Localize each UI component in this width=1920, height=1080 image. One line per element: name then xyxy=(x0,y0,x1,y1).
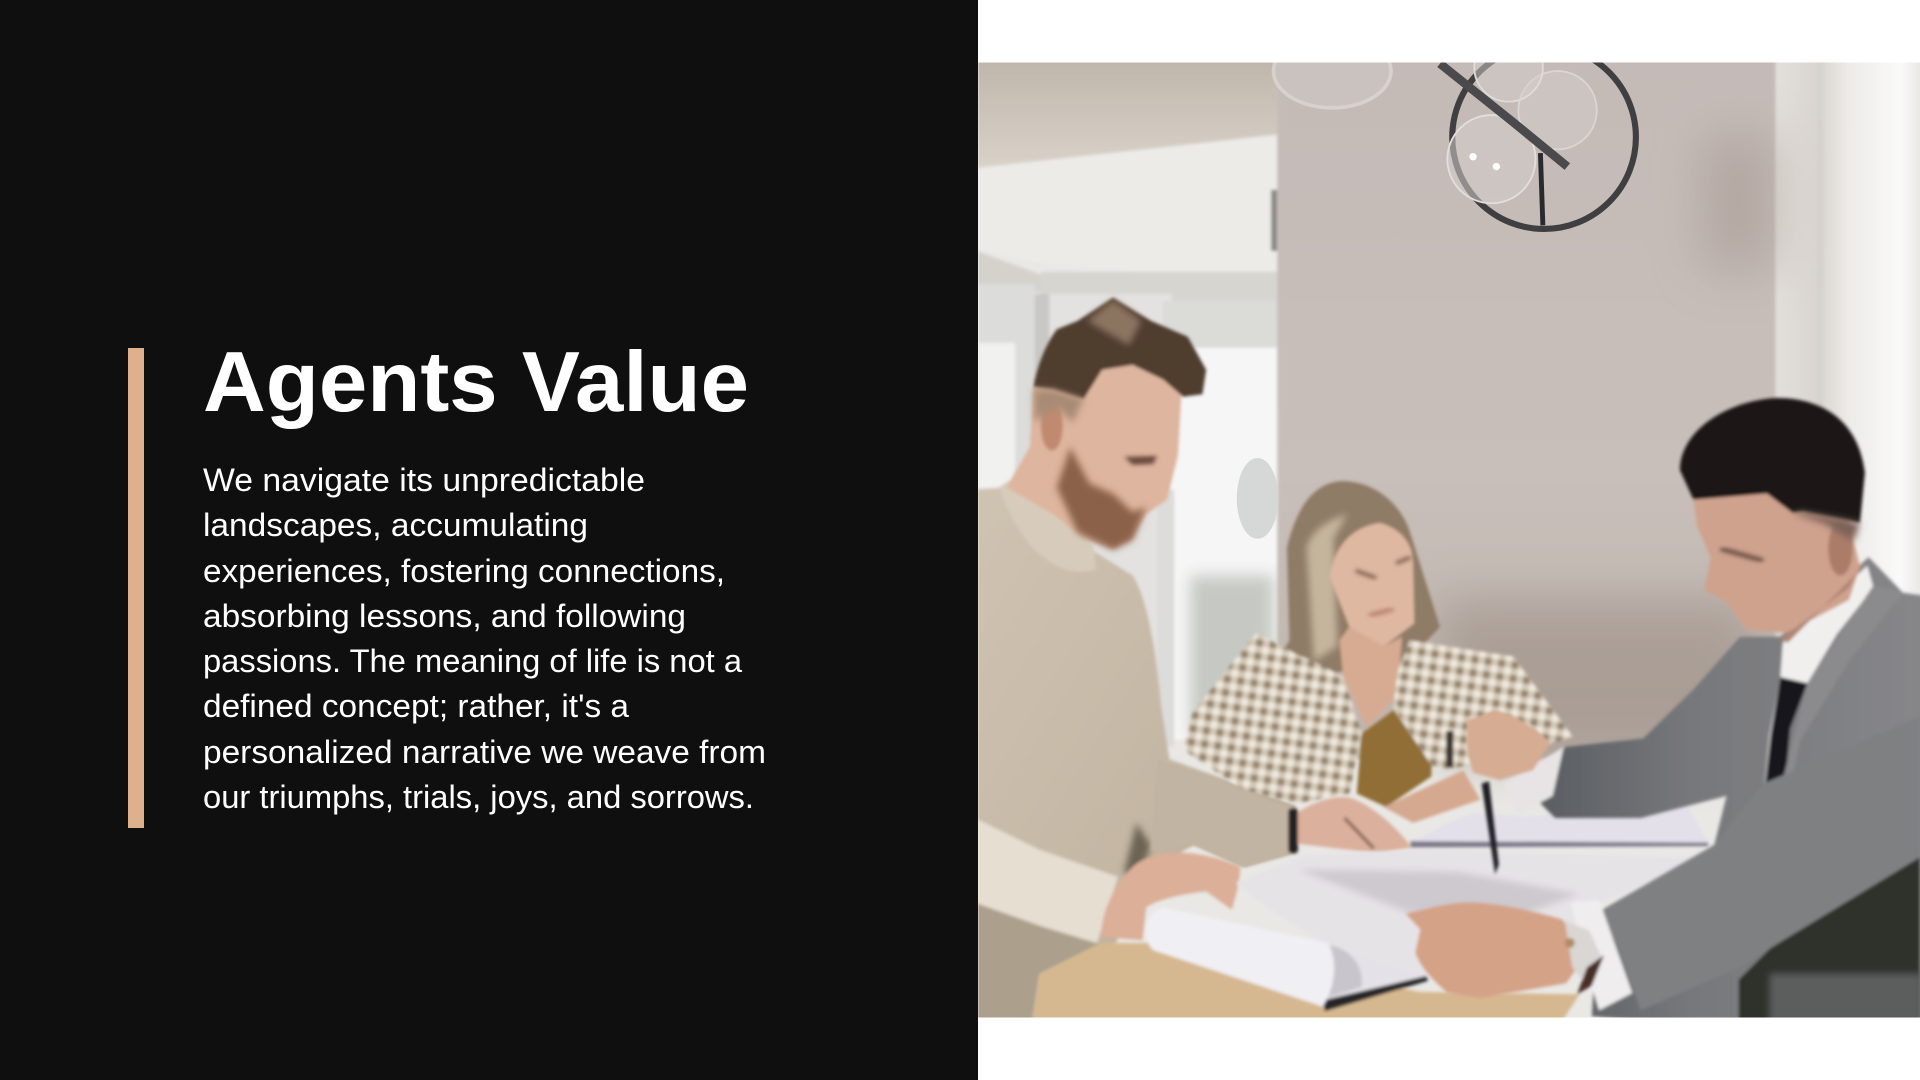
person: right man xyxy=(1406,398,1920,1029)
body text: experiences, fostering connections, xyxy=(203,553,725,589)
person: woman xyxy=(1183,481,1573,823)
body text: absorbing lessons, and following xyxy=(203,598,686,634)
person: left man xyxy=(967,298,1296,1022)
body text: passions. The meaning of life is not a xyxy=(203,643,742,679)
wall xyxy=(1277,49,1779,759)
title: Agents Value xyxy=(203,335,749,430)
pendant lamp xyxy=(1237,33,1636,539)
body text: our triumphs, trials, joys, and sorrows. xyxy=(203,779,754,815)
photo background: room xyxy=(967,49,1920,1029)
right man: suit xyxy=(1533,557,1920,1029)
body text: landscapes, accumulating xyxy=(203,507,588,543)
right man: cuff and hand xyxy=(1571,900,1632,1010)
left man: hand xyxy=(1101,853,1240,940)
table and papers xyxy=(1032,838,1710,1018)
photo: three people reviewing floor plans at a table xyxy=(967,33,1920,1029)
woman: jacket xyxy=(1183,633,1362,803)
woman: face xyxy=(1330,523,1414,647)
body text: personalized narrative we weave from xyxy=(203,734,766,770)
woman: arm xyxy=(1384,770,1480,823)
left man: forearm and hand over jacket xyxy=(1150,792,1412,868)
panel: dark left panel xyxy=(0,0,978,1080)
right man: shirt and tie xyxy=(1762,564,1875,784)
left man: sweater xyxy=(967,487,1296,1022)
curtain xyxy=(1776,49,1920,661)
accent bar xyxy=(128,348,144,828)
body text: We navigate its unpredictable xyxy=(203,462,645,498)
woman: hair xyxy=(1273,481,1440,676)
body text xyxy=(203,462,766,815)
body text: defined concept; rather, it's a xyxy=(203,688,629,724)
right man: head xyxy=(1693,493,1860,633)
left man: head xyxy=(1007,343,1183,550)
